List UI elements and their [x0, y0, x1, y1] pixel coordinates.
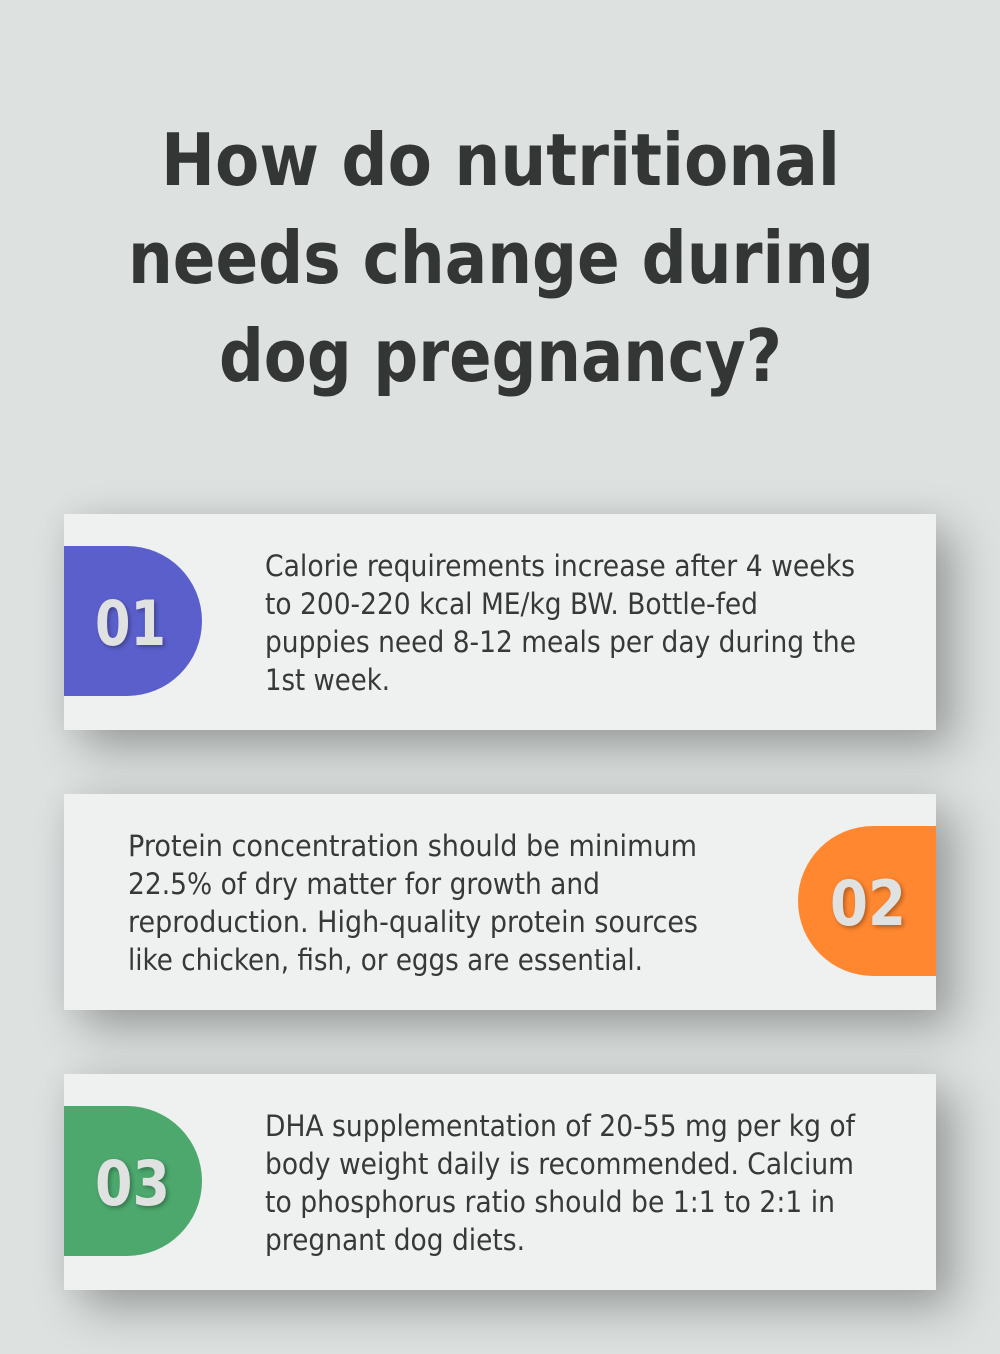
text: calories and meals: puppies need 8-12 meals per day during the [265, 625, 856, 659]
text: calories and meals: Calorie requirements increase after 4 weeks [265, 549, 855, 583]
badge: 01 [64, 546, 202, 696]
text: calories and meals: 1st week. [265, 663, 390, 697]
text: supplementation: DHA supplementation of 20-55 mg per kg of [265, 1109, 856, 1143]
badge: 02: 02 [830, 867, 906, 940]
text: protein sources: like chicken, fish, or eggs are essential. [128, 943, 643, 977]
panel: protein concentration [64, 794, 936, 1010]
panel: DHA and calcium [64, 1074, 936, 1290]
text: calories and meals: to 200-220 kcal ME/kg BW. Bottle-fed [265, 587, 758, 621]
text: calories and meals [265, 549, 856, 697]
text: protein sources: Protein concentration should be minimum [128, 829, 697, 863]
text: protein sources [128, 829, 698, 977]
badge: 03: 03 [95, 1147, 170, 1220]
title: How do nutritional [161, 118, 840, 202]
text: protein sources: 22.5% of dry matter for growth and [128, 867, 600, 901]
panel: calorie requirements [64, 514, 936, 730]
text: protein sources: reproduction. High-quality protein sources [128, 905, 698, 939]
text: supplementation: to phosphorus ratio should be 1:1 to 2:1 in [265, 1185, 835, 1219]
text: supplementation: pregnant dog diets. [265, 1223, 525, 1257]
title [128, 118, 874, 398]
badge: 03 [64, 1106, 202, 1256]
title: needs change during [128, 216, 874, 300]
title: dog pregnancy? [219, 314, 782, 398]
text: supplementation [265, 1109, 856, 1257]
badge: 01: 01 [95, 587, 166, 660]
text: supplementation: body weight daily is recommended. Calcium [265, 1147, 854, 1181]
badge: 02 [798, 826, 936, 976]
